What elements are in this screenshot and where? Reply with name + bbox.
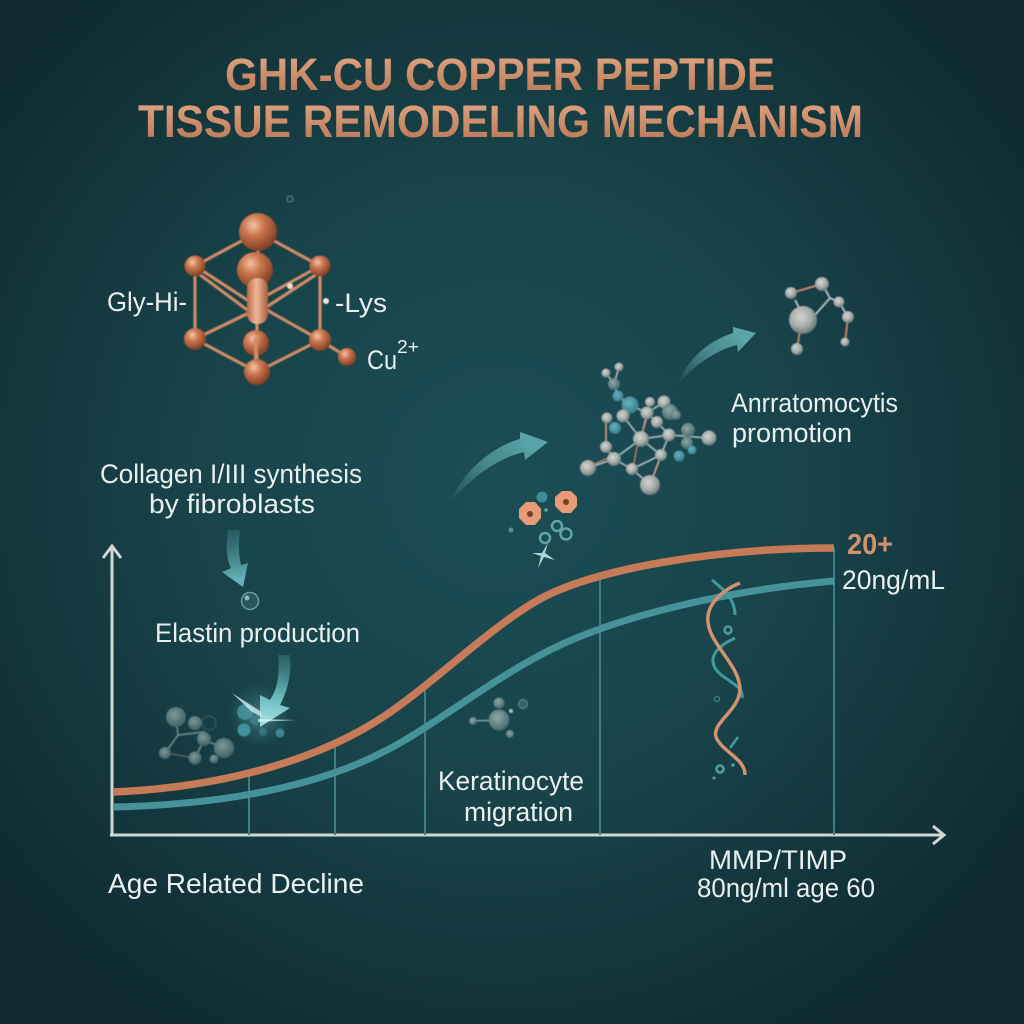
text: keratinocyte migration: Keratinocyte bbox=[438, 766, 584, 796]
label: -Lys: -Lys bbox=[335, 288, 387, 318]
text: anratomocytis promotion bbox=[731, 388, 898, 448]
label: MMP/TIMP: 80ng/ml age 60 bbox=[697, 873, 875, 903]
arrow: rising arrow one bbox=[450, 432, 548, 503]
icon: hexagons and rings bbox=[508, 491, 577, 568]
chart: age related decline curves bbox=[103, 546, 944, 844]
title: TISSUE REMODELING MECHANISM bbox=[138, 96, 863, 147]
label: Cu2+ bbox=[367, 337, 419, 375]
label: 20+: 20+ bbox=[847, 529, 893, 561]
label: MMP/TIMP bbox=[697, 845, 875, 903]
label: age related decline: Age Related Decline bbox=[108, 868, 364, 899]
icon: DNA helix bbox=[708, 580, 745, 780]
text: keratinocyte migration: migration bbox=[464, 797, 573, 827]
arrow: collagen to elastin bbox=[222, 530, 248, 587]
text: elastin production: Elastin production bbox=[155, 618, 360, 648]
icon: grey molecule top right bbox=[785, 277, 854, 355]
label: Gly-Hi-: Gly-Hi- bbox=[107, 287, 187, 317]
icon: grey central molecule bbox=[580, 362, 716, 495]
label: Cu2+: Cu bbox=[367, 345, 397, 375]
title: GHK-CU COPPER PEPTIDE bbox=[225, 49, 775, 100]
copper curve bbox=[113, 548, 834, 792]
chart axes bbox=[103, 546, 944, 844]
text: collagen synthesis: Collagen I/III synthesis bbox=[100, 459, 362, 489]
title bbox=[138, 49, 863, 147]
icon: faded grey molecule bbox=[159, 707, 234, 764]
icon: glowing particles and arrow bbox=[228, 655, 297, 747]
icon: faded small molecule bbox=[469, 698, 528, 738]
text: collagen synthesis bbox=[100, 459, 362, 519]
text: keratinocyte migration bbox=[438, 766, 584, 827]
chart gridlines bbox=[249, 548, 834, 835]
label: MMP/TIMP: MMP/TIMP bbox=[709, 845, 847, 875]
text: anratomocytis promotion: Anrratomocytis bbox=[731, 388, 898, 418]
label: 20ng/mL: 20ng/mL bbox=[842, 565, 945, 595]
text: collagen synthesis: by fibroblasts bbox=[149, 489, 315, 519]
teal curve bbox=[113, 581, 834, 807]
label: Cu2+: 2+ bbox=[397, 337, 419, 357]
arrow: rising arrow two bbox=[678, 327, 756, 384]
text: anratomocytis promotion: promotion bbox=[732, 418, 852, 448]
icon: GHK-Cu copper molecule bbox=[184, 196, 356, 385]
icon: small bubble bbox=[242, 592, 258, 610]
